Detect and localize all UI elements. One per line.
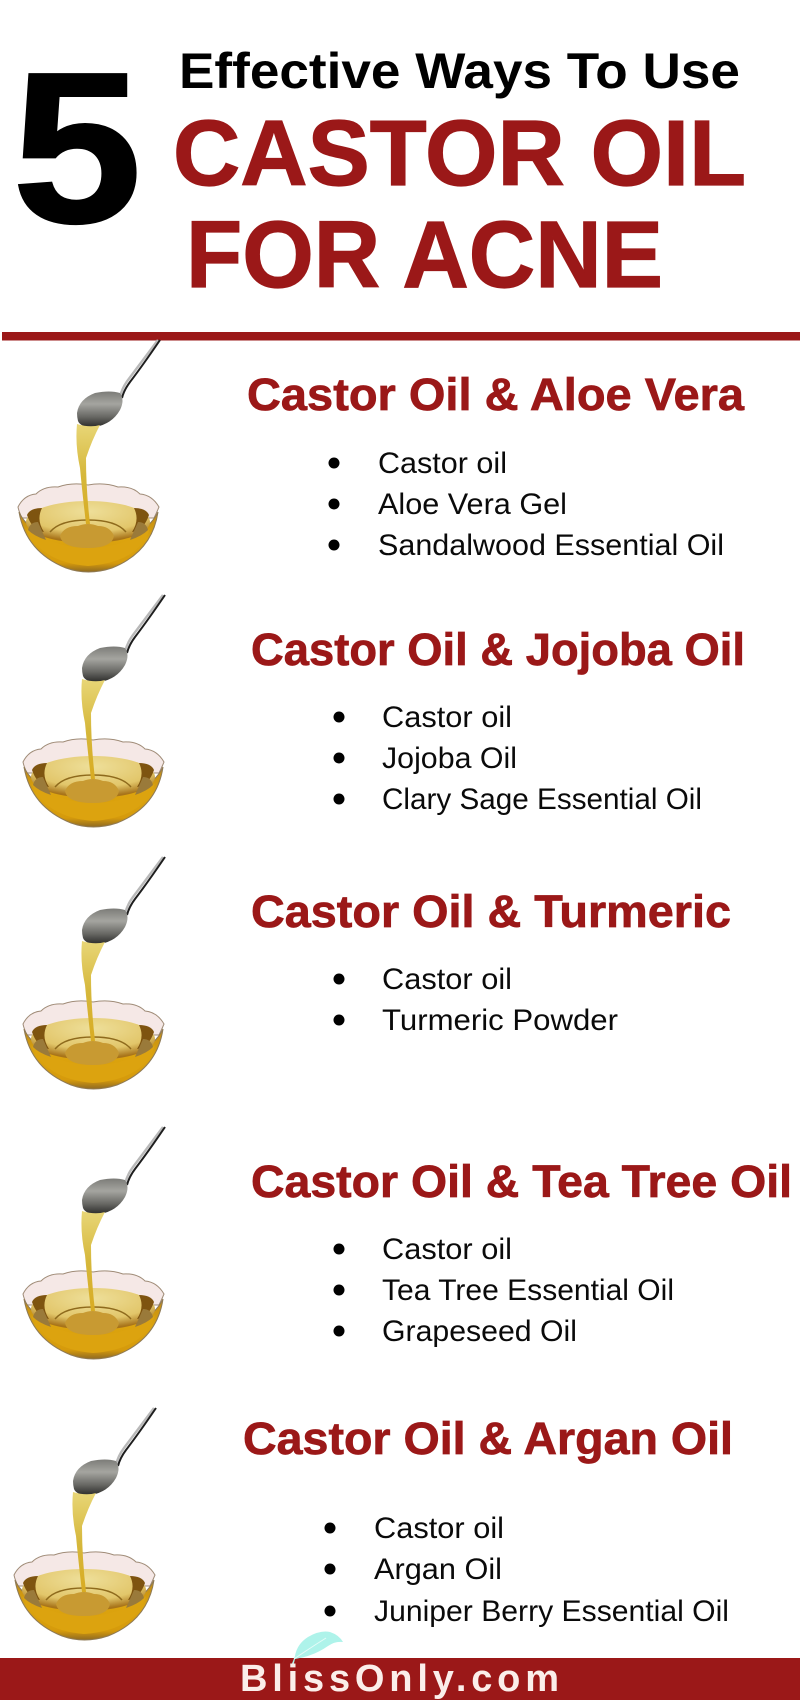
- ingredient list: [334, 701, 702, 816]
- panel: castor oil and tea tree oil: [23, 1127, 792, 1359]
- title: number 5: 5: [12, 27, 142, 268]
- panel: castor oil and aloe vera: [18, 340, 745, 572]
- icon: oil bowl and spoon: [14, 1408, 156, 1640]
- ingredient list: Jojoba Oil: [382, 742, 517, 775]
- ingredient list: Castor oil: [382, 963, 512, 996]
- icon: oil bowl and spoon: [23, 1127, 165, 1359]
- panel: castor oil and turmeric: [23, 857, 731, 1089]
- panel: castor oil and jojoba oil: [23, 595, 745, 827]
- title: Effective Ways To Use: Effective Ways To Use: [179, 43, 740, 99]
- ingredient list: Argan Oil: [374, 1553, 502, 1586]
- ingredient list: Clary Sage Essential Oil: [382, 783, 702, 816]
- ingredient list: Castor oil: [382, 1233, 512, 1266]
- header divider bar: [2, 332, 800, 340]
- title: CASTOR OIL: CASTOR OIL: [173, 101, 746, 205]
- icon: oil bowl and spoon: [23, 595, 165, 827]
- heading: Castor Oil & Aloe Vera: [247, 369, 745, 420]
- ingredient list: Castor oil: [374, 1512, 504, 1545]
- heading: Castor Oil & Argan Oil: [243, 1413, 733, 1464]
- ingredient list: Castor oil: [378, 447, 507, 480]
- icon: oil bowl and spoon: [23, 857, 165, 1089]
- heading: Castor Oil & Tea Tree Oil: [251, 1156, 792, 1207]
- ingredient list: [334, 963, 618, 1037]
- footer bar: [0, 1658, 800, 1700]
- ingredient list: Tea Tree Essential Oil: [382, 1274, 674, 1307]
- ingredient list: Turmeric Powder: [382, 1004, 618, 1037]
- ingredient list: Castor oil: [382, 701, 512, 734]
- panel: castor oil and argan oil: [14, 1408, 733, 1640]
- ingredient list: [328, 447, 724, 562]
- ingredient list: [324, 1512, 729, 1628]
- heading: Castor Oil & Jojoba Oil: [251, 624, 745, 675]
- title: FOR ACNE: FOR ACNE: [186, 202, 663, 308]
- ingredient list: Sandalwood Essential Oil: [378, 529, 724, 562]
- ingredient list: Grapeseed Oil: [382, 1315, 577, 1348]
- icon: leaf: [291, 1632, 343, 1667]
- heading: Castor Oil & Turmeric: [251, 886, 731, 937]
- icon: oil bowl and spoon: [18, 340, 160, 572]
- ingredient list: Juniper Berry Essential Oil: [374, 1595, 729, 1628]
- footer brand text: BlissOnly.com: [240, 1658, 559, 1700]
- ingredient list: [334, 1233, 674, 1348]
- ingredient list: Aloe Vera Gel: [378, 488, 567, 521]
